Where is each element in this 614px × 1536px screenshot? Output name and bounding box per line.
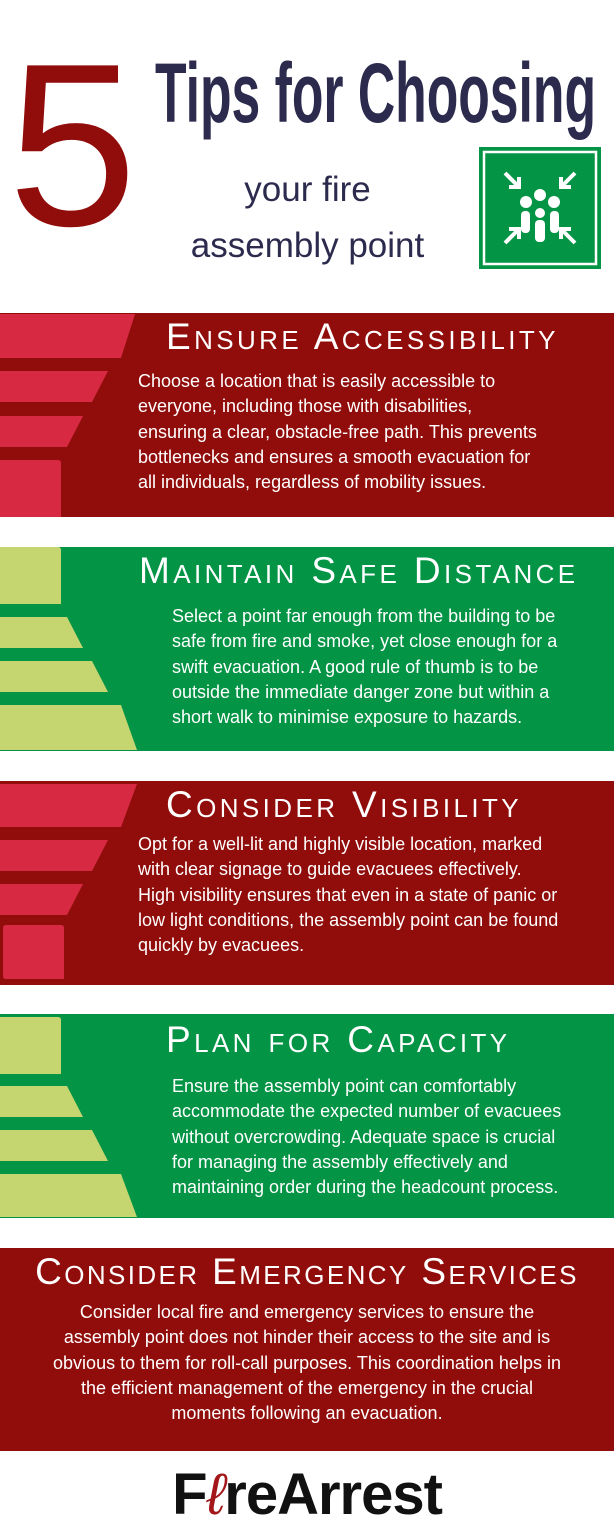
body text: Ensure the assembly point can comfortably <box>172 1076 516 1096</box>
body text: assembly point does not hinder their access to the site and is <box>64 1327 550 1347</box>
body text: short walk to minimise exposure to hazards. <box>172 707 522 727</box>
body text: low light conditions, the assembly point can be found <box>138 910 558 930</box>
body text: for managing the assembly effectively and <box>172 1152 508 1172</box>
body text: obvious to them for roll-call purposes. This coordination helps in <box>53 1353 561 1373</box>
body text: bottlenecks and ensures a smooth evacuation for <box>138 447 530 467</box>
panel: Consider Visibility <box>0 781 614 985</box>
panel: Ensure Accessibility <box>0 313 614 517</box>
heading: Maintain Safe Distance <box>139 550 579 591</box>
body text: accommodate the expected number of evacuees <box>172 1101 561 1121</box>
body text: maintaining order during the headcount process. <box>172 1177 558 1197</box>
body text: Choose a location that is easily accessible to <box>138 371 495 391</box>
title number 5: 5 <box>8 16 137 275</box>
body text: swift evacuation. A good rule of thumb is to be <box>172 657 538 677</box>
panel: Consider Emergency Services <box>0 1248 614 1451</box>
icon: assembly point sign <box>479 147 601 269</box>
subtitle: assembly point <box>191 226 424 265</box>
body text: without overcrowding. Adequate space is crucial <box>172 1127 555 1147</box>
body text: Select a point far enough from the building to be <box>172 606 555 626</box>
steps decoration <box>0 784 137 979</box>
body text: ensuring a clear, obstacle-free path. This prevents <box>138 422 537 442</box>
body text <box>53 1302 561 1423</box>
heading: Consider Visibility <box>166 784 522 825</box>
body text: quickly by evacuees. <box>138 935 304 955</box>
steps decoration <box>0 314 135 517</box>
steps decoration <box>0 547 137 750</box>
body text <box>172 1076 561 1197</box>
body text: Opt for a well-lit and highly visible location, marked <box>138 834 542 854</box>
panel: Plan for Capacity <box>0 1014 614 1218</box>
heading: Plan for Capacity <box>166 1019 511 1060</box>
body text: moments following an evacuation. <box>171 1403 443 1423</box>
body text <box>138 371 537 492</box>
heading: Consider Emergency Services <box>35 1251 579 1292</box>
body text: everyone, including those with disabilities, <box>138 396 472 416</box>
body text: with clear signage to guide evacuees effectively. <box>138 859 522 879</box>
body text <box>172 606 558 727</box>
subtitle: your fire <box>244 170 371 209</box>
panel: Maintain Safe Distance <box>0 547 614 751</box>
heading: Ensure Accessibility <box>166 316 559 357</box>
body text: outside the immediate danger zone but within a <box>172 682 549 702</box>
logo: FireArrest: FℓreArrest <box>172 1462 442 1527</box>
body text: High visibility ensures that even in a state of panic or <box>138 885 557 905</box>
title: Tips for Choosing: Tips for Choosing <box>155 46 596 140</box>
body text: the efficient management of the emergency in the crucial <box>81 1378 533 1398</box>
body text: safe from fire and smoke, yet close enough for a <box>172 631 557 651</box>
steps decoration <box>0 1017 137 1217</box>
body text: all individuals, regardless of mobility issues. <box>138 472 486 492</box>
body text <box>138 834 558 955</box>
subtitle <box>191 170 424 265</box>
body text: Consider local fire and emergency services to ensure the <box>80 1302 534 1322</box>
